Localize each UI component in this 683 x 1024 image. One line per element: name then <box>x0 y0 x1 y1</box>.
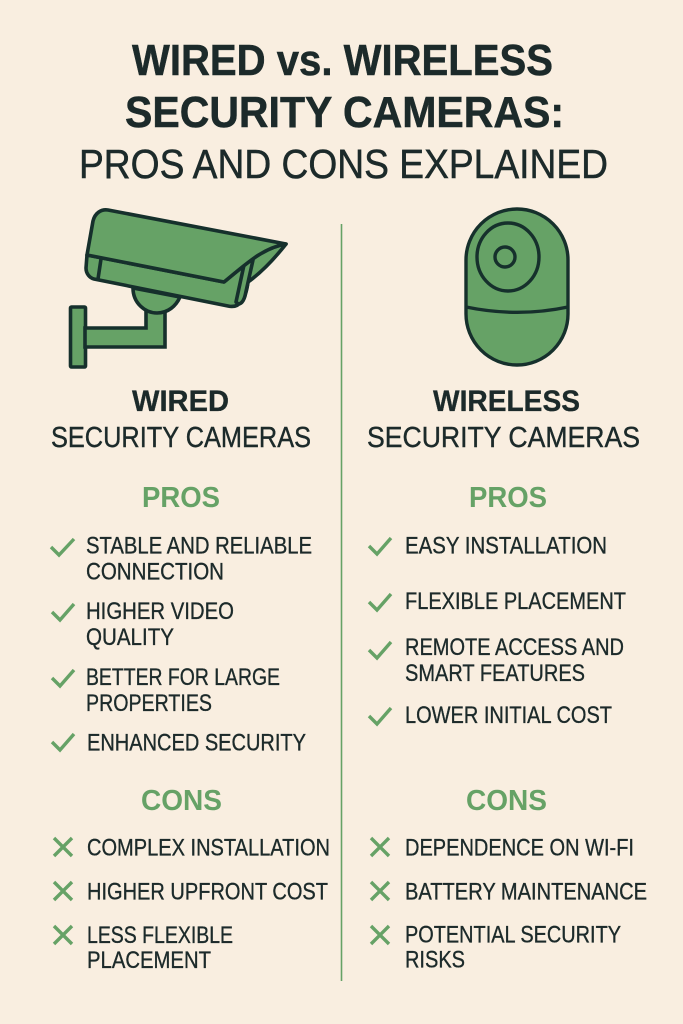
wired pro 1: STABLE AND RELIABLE <box>86 532 312 560</box>
wired pro 2: QUALITY <box>86 624 174 651</box>
heading: wireless <box>367 385 640 454</box>
title: WIRED vs. WIRELESS <box>132 36 553 85</box>
heading: wireless pros: PROS <box>469 482 547 514</box>
heading: wireless: WIRELESS <box>433 385 580 418</box>
heading: wireless: SECURITY CAMERAS <box>367 422 640 454</box>
wired pro 4: ENHANCED SECURITY <box>87 730 306 756</box>
heading: wired cons: CONS <box>141 785 222 817</box>
wired pro 1: CONNECTION <box>86 558 224 586</box>
wired pro 3: BETTER FOR LARGE <box>86 664 280 691</box>
wireless con 3 <box>371 922 621 974</box>
wired pro 2 <box>52 598 234 651</box>
wireless con 1: DEPENDENCE ON WI-FI <box>405 834 634 862</box>
heading: wired pros: PROS <box>142 482 220 514</box>
panel: wireless pros <box>369 482 626 729</box>
wireless pro 4: LOWER INITIAL COST <box>405 702 612 729</box>
title: PROS AND CONS EXPLAINED <box>79 141 608 187</box>
heading: wired: WIRED <box>132 385 229 418</box>
wireless pro 1: EASY INSTALLATION <box>405 532 607 560</box>
heading: wired <box>51 385 311 454</box>
wireless con 3: RISKS <box>405 946 465 974</box>
wireless con 3: POTENTIAL SECURITY <box>405 922 621 948</box>
wireless pro 2: FLEXIBLE PLACEMENT <box>405 588 626 615</box>
title: SECURITY CAMERAS: <box>125 88 564 137</box>
panel: wireless cons <box>371 785 647 974</box>
wired con 3 <box>54 922 233 974</box>
heading: wired: SECURITY CAMERAS <box>51 422 311 454</box>
icon: wired bullet camera <box>70 210 286 367</box>
panel: wired cons <box>54 785 330 974</box>
wired con 3: LESS FLEXIBLE <box>87 922 233 949</box>
wireless pro 3: SMART FEATURES <box>405 660 585 687</box>
wired pro 2: HIGHER VIDEO <box>86 598 234 625</box>
wireless pro 3 <box>369 634 624 687</box>
panel: wired pros <box>51 482 312 756</box>
wireless pro 3: REMOTE ACCESS AND <box>405 634 624 661</box>
heading: wireless cons: CONS <box>466 785 547 817</box>
icon: wireless dome camera <box>466 209 568 365</box>
wired con 3: PLACEMENT <box>87 947 211 974</box>
wired pro 1 <box>51 532 312 586</box>
wired pro 3 <box>52 664 280 717</box>
wired pro 3: PROPERTIES <box>86 690 212 717</box>
wired con 1: COMPLEX INSTALLATION <box>87 834 330 862</box>
title <box>79 36 608 187</box>
wired con 2: HIGHER UPFRONT COST <box>87 878 328 906</box>
